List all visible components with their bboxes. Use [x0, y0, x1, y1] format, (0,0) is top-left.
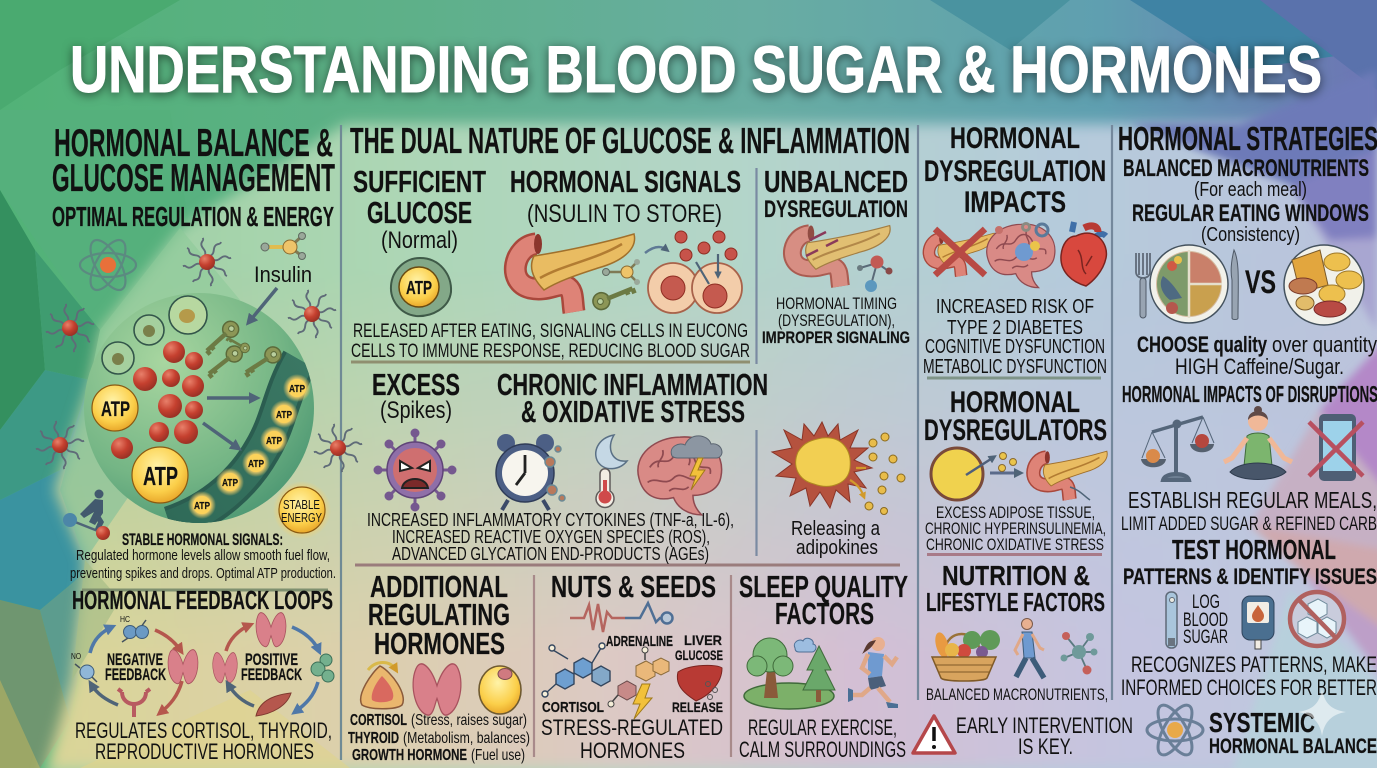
heading: feedback loops: HORMONAL FEEDBACK LOOPS	[72, 585, 333, 615]
small ATP particles: ATP	[248, 459, 264, 470]
heading: hormonal signals	[510, 164, 741, 228]
icon: angry virus	[375, 430, 455, 510]
text: macronutrients and eating windows: (Consistency)	[1201, 224, 1300, 246]
heading: nutrition and lifestyle: LIFESTYLE FACTORS	[926, 587, 1105, 617]
column dividers	[82, 125, 1112, 760]
panel: additional regulating hormones	[348, 569, 530, 764]
chart: negative feedback loop: NO	[71, 652, 81, 661]
label: log blood sugar	[1183, 592, 1228, 648]
icon: runner with molecule	[63, 490, 110, 540]
icon: adipose to pancreas	[931, 448, 1107, 500]
heading: sufficient glucose: (Normal)	[381, 227, 458, 254]
panel: hormonal dysregulation impacts	[923, 122, 1108, 704]
labels: liver glucose release: RELEASE	[672, 699, 723, 715]
icon: heartbeat line	[570, 603, 672, 632]
heading: nuts and seeds: NUTS & SEEDS	[551, 569, 716, 604]
label: log blood sugar: BLOOD	[1183, 610, 1228, 631]
text: macronutrients and eating windows: (For each meal)	[1194, 179, 1307, 201]
chart: negative feedback loop: NEGATIVE	[107, 650, 163, 669]
icon: adrenaline molecule with bolt	[608, 647, 669, 719]
panel: sleep quality factors	[739, 569, 908, 762]
icon: brain with storm cloud	[638, 436, 722, 515]
chart: negative feedback loop	[71, 615, 198, 717]
keys	[202, 318, 284, 380]
heading: hormonal dysregulators: DYSREGULATORS	[924, 414, 1107, 447]
text: regular exercise: REGULAR EXERCISE,	[748, 715, 897, 740]
text: choose quality: CHOOSE quality	[1137, 332, 1268, 357]
text: hormonal timing	[762, 294, 910, 347]
small ATP particles: ATP	[194, 501, 210, 512]
glucose balls	[111, 341, 204, 459]
icon: meditating person	[1224, 406, 1292, 480]
icon: brain with gears	[987, 224, 1055, 288]
labels: liver glucose release	[672, 632, 723, 715]
text: released after eating: RELEASED AFTER EATING, SIGNALING CELLS IN EUCONG	[353, 321, 748, 342]
text: dysregulator list: EXCESS ADIPOSE TISSUE,	[936, 503, 1095, 522]
heading: hormonal signals: HORMONAL SIGNALS	[510, 164, 741, 199]
text: regulating hormones list: GROWTH HORMONE	[352, 747, 467, 764]
text: regulating hormones list: (Stress, raises sugar)	[411, 712, 527, 729]
text: macronutrients and eating windows	[1123, 155, 1369, 246]
icon: atom	[80, 235, 136, 295]
icon: sparkle watermark	[1298, 688, 1346, 736]
text: dysregulation risks: COGNITIVE DYSFUNCTION	[925, 336, 1105, 358]
heading: unbalanced: UNBALNCED	[764, 164, 908, 199]
icon: adrenal gland	[361, 662, 403, 709]
text: stable hormonal signals: STABLE HORMONAL SIGNALS:	[122, 531, 283, 549]
text: stress regulated hormones	[541, 715, 723, 763]
text: regular exercise: CALM SURROUNDINGS	[739, 737, 906, 762]
text: dysregulator list	[925, 503, 1106, 554]
heading: hormonal balance: GLUCOSE MANAGEMENT	[52, 157, 335, 200]
ATP large: ATP	[101, 398, 130, 421]
heading: sleep quality: SLEEP QUALITY	[739, 569, 908, 604]
heading: hormonal signals: (NSULIN TO STORE)	[527, 200, 722, 228]
heading: dysregulation impacts: IMPACTS	[964, 186, 1066, 219]
small ATP particles: ATP	[289, 384, 305, 395]
small ATP particles: ATP	[266, 436, 282, 447]
icon: balanced plate with cutlery	[1136, 245, 1238, 323]
heading: hormonal dysregulators: HORMONAL	[950, 386, 1080, 419]
panel: nuts and seeds	[541, 569, 723, 763]
icon: ATP cell: ATP	[406, 278, 432, 298]
heading: sleep quality: FACTORS	[775, 596, 874, 631]
icon: food basket	[932, 630, 1000, 681]
text: recognizes patterns	[1121, 652, 1377, 700]
heading: unbalanced	[764, 164, 908, 223]
text: stable hormonal signals: Regulated hormone levels allow smooth fuel flow,	[76, 547, 330, 564]
text: stress regulated hormones: STRESS-REGULATED	[541, 715, 723, 740]
icon: floating pathogens	[36, 238, 362, 472]
text: hormonal timing: IMPROPER SIGNALING	[762, 328, 910, 347]
ATP large: ATP	[143, 461, 178, 491]
label: versus: VS	[1245, 264, 1276, 300]
heading: additional regulating hormones: HORMONES	[374, 626, 505, 661]
text: released after eating: CELLS TO IMMUNE RESPONSE, REDUCING BLOOD SUGAR	[351, 341, 750, 362]
heading: additional regulating hormones: REGULATING	[368, 597, 510, 632]
heading: excess	[372, 367, 460, 424]
text: dysregulator list: CHRONIC OXIDATIVE STRESS	[926, 535, 1104, 554]
text: choose quality	[1137, 332, 1377, 379]
icon: cortisol molecule	[542, 643, 610, 697]
chart: positive feedback loop	[213, 613, 334, 716]
text: stable hormonal signals: preventing spikes and drops. Optimal ATP production.	[70, 565, 336, 582]
text: regulating hormones list: CORTISOL	[350, 712, 407, 729]
heading: hormonal balance: HORMONAL BALANCE &	[54, 122, 333, 165]
text: releasing adipokines: Releasing a	[791, 518, 881, 540]
labels: liver glucose release: LIVER	[684, 632, 722, 648]
text: cytokines list: ADVANCED GLYCATION END-PRODUCTS (AGEs)	[392, 543, 709, 564]
text: regulating hormones list: (Metabolism, balances)	[403, 730, 530, 747]
icon: pancreas	[515, 234, 635, 312]
text: regulating hormones list: THYROID	[348, 730, 399, 747]
icon: balance scale	[1141, 417, 1214, 480]
label: cortisol: CORTISOL	[542, 699, 604, 716]
label: log blood sugar: LOG	[1192, 592, 1220, 613]
heading: unbalanced: DYSREGULATION	[764, 196, 908, 223]
icon: insulin molecule	[261, 232, 306, 260]
text: cytokines list: INCREASED INFLAMMATORY CYTOKINES (TNF-a, IL-6),	[367, 509, 734, 530]
text: dysregulation risks	[923, 296, 1107, 378]
chart: negative feedback loop: HC	[120, 615, 130, 624]
panel: hormonal strategies	[1118, 120, 1377, 760]
icon: glucose meter	[1242, 596, 1274, 649]
small ATP particles: ATP	[276, 410, 292, 421]
text: dysregulation risks: INCREASED RISK OF	[936, 296, 1094, 318]
heading: additional regulating hormones: ADDITIONAL	[370, 569, 508, 604]
text: dysregulation risks: METABOLIC DYSFUNCTION	[923, 356, 1107, 378]
icon: test strip	[1166, 592, 1177, 648]
heading: hormonal dysregulators	[924, 386, 1107, 447]
heading: chronic inflammation	[497, 367, 768, 429]
blood vessel	[170, 360, 300, 525]
chart: positive feedback loop: FEEDBACK	[241, 665, 302, 684]
text: dysregulation risks: TYPE 2 DIABETES	[947, 317, 1083, 339]
icon: runner	[848, 637, 898, 708]
icon: heart	[1061, 222, 1106, 286]
arrows to vessel	[203, 398, 256, 448]
badge: stable energy	[273, 481, 331, 539]
heading: additional regulating hormones	[368, 569, 510, 661]
heading: dysregulation impacts	[924, 122, 1106, 219]
icon: damaged pancreas	[792, 226, 892, 292]
text: early intervention: EARLY INTERVENTION	[956, 713, 1133, 738]
icon: warning triangle	[913, 716, 955, 753]
text: hormonal timing: (DYSREGULATION),	[778, 311, 895, 330]
heading: dual nature: THE DUAL NATURE OF GLUCOSE & INFLAMMATION	[350, 120, 910, 161]
badge: stable energy: STABLE	[283, 497, 320, 512]
text: cytokines list	[367, 509, 734, 564]
text: releasing adipokines	[791, 518, 881, 559]
arrow: insulin to keys	[249, 288, 277, 322]
heading: dysregulation impacts: HORMONAL	[950, 122, 1080, 155]
label: insulin: Insulin	[254, 262, 312, 287]
icon: growth hormone cell	[479, 666, 521, 714]
heading: sufficient glucose: SUFFICIENT	[353, 164, 486, 199]
heading: sleep quality	[739, 569, 908, 631]
icon: molecule	[1060, 632, 1098, 674]
text: dysregulator list: CHRONIC HYPERINSULINEMIA,	[925, 519, 1106, 538]
text: early intervention	[956, 713, 1133, 759]
heading: chronic inflammation: CHRONIC INFLAMMATION	[497, 367, 768, 402]
text: regulates hormones	[75, 718, 332, 764]
text: balanced macronutrients: BALANCED MACRONUTRIENTS,	[926, 685, 1108, 704]
badge: stable energy: ENERGY	[281, 510, 322, 525]
text: cytokines list: INCREASED REACTIVE OXYGEN SPECIES (ROS),	[392, 526, 710, 547]
diagram: cell with glucose, ATP and blood vessel	[84, 293, 314, 525]
ATP large	[92, 385, 188, 503]
text: regulates hormones: REGULATES CORTISOL, THYROID,	[75, 718, 332, 743]
text: released after eating	[351, 321, 750, 362]
text: establish regular meals	[1121, 487, 1377, 535]
heading: hormonal balance: OPTIMAL REGULATION & ENERGY	[52, 201, 334, 232]
small ATP particles: ATP	[222, 478, 238, 489]
text: regulating hormones list	[348, 712, 530, 764]
heading: sufficient glucose: GLUCOSE	[367, 195, 472, 230]
heading: excess: EXCESS	[372, 367, 460, 402]
icon: moon and thermometer	[596, 435, 627, 507]
icon: cells absorbing glucose	[645, 231, 742, 313]
icon: ATP cell	[391, 258, 451, 316]
text: stable hormonal signals	[70, 531, 336, 582]
chart: positive feedback loop: POSITIVE	[245, 650, 298, 669]
text: releasing adipokines: adipokines	[796, 537, 878, 559]
label: adrenaline: ADRENALINE	[606, 633, 673, 650]
icon: liver	[677, 665, 722, 701]
text: regulates hormones: REPRODUCTIVE HORMONES	[95, 739, 314, 764]
heading: sufficient glucose	[353, 164, 486, 254]
panel: hormonal balance and glucose management	[36, 122, 362, 764]
icon: thyroid gland	[413, 664, 461, 715]
heading: hormonal balance	[52, 122, 335, 232]
icon: systemic atom	[1147, 700, 1203, 760]
heading: excess: (Spikes)	[380, 397, 452, 424]
icon: trees and park	[744, 638, 835, 709]
icon: no sugar	[1290, 592, 1344, 646]
icon: junk food plate	[1284, 245, 1364, 325]
icon: alarm clock	[496, 434, 565, 510]
label: log blood sugar: SUGAR	[1183, 627, 1228, 648]
icon: crossed phone	[1309, 414, 1363, 481]
icon: insulin and key	[590, 259, 640, 312]
heading: nutrition and lifestyle	[926, 560, 1105, 617]
heading: test hormonal patterns	[1123, 534, 1377, 589]
text: regular exercise	[739, 715, 906, 762]
text: early intervention: IS KEY.	[1018, 734, 1073, 759]
small ATP particles	[188, 374, 311, 519]
heading: dysregulation impacts: DYSREGULATION	[924, 155, 1106, 188]
panel: dual nature of glucose and inflammation	[350, 120, 910, 564]
text: systemic hormonal balance: SYSTEMIC	[1209, 707, 1315, 738]
text: regulating hormones list: (Fuel use)	[471, 747, 525, 764]
cells	[102, 296, 207, 374]
text: hormonal timing: HORMONAL TIMING	[776, 294, 897, 313]
heading: nutrition and lifestyle: NUTRITION &	[942, 560, 1090, 591]
icon: crossed pancreas	[929, 229, 995, 276]
icon: fat cell burst	[772, 422, 905, 514]
icon: walking person	[1015, 618, 1044, 678]
text: stress regulated hormones: HORMONES	[580, 738, 685, 763]
text: systemic hormonal balance	[1209, 707, 1377, 758]
heading: chronic inflammation: & OXIDATIVE STRESS	[521, 394, 745, 429]
labels: liver glucose release: GLUCOSE	[675, 647, 723, 663]
chart: negative feedback loop: FEEDBACK	[105, 665, 166, 684]
